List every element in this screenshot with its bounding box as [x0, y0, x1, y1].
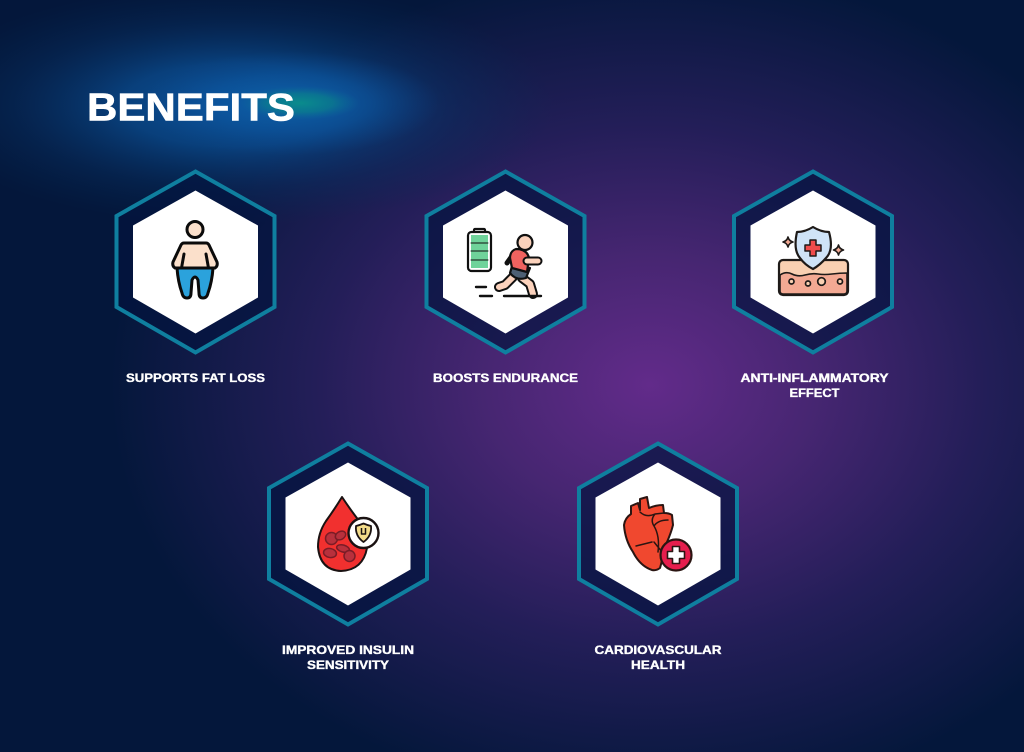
hexagon badge [734, 172, 892, 352]
label: IMPROVED INSULIN [282, 643, 414, 657]
hexagon badge [116, 172, 274, 352]
label: BOOSTS ENDURANCE [433, 371, 578, 385]
icon: shield over skin [779, 227, 848, 295]
icon: heart with cross [624, 497, 692, 570]
label: CARDIOVASCULAR [594, 643, 722, 657]
title: BENEFITS [87, 86, 295, 130]
icon: person with loose trousers [173, 222, 217, 298]
panel: improved insulin sensitivity: SENSITIVITY [307, 658, 389, 672]
panel: anti-inflammatory effect: EFFECT [790, 386, 840, 400]
panel: cardiovascular health: HEALTH [631, 658, 685, 672]
panel: cardiovascular health [579, 444, 737, 672]
title glow [0, 0, 600, 240]
panel: anti-inflammatory effect [734, 172, 892, 400]
icon: battery and runner [468, 229, 541, 296]
icon: blood drop with shield [318, 497, 378, 571]
label: SUPPORTS FAT LOSS [126, 371, 265, 385]
hexagon badge [269, 444, 427, 624]
label: ANTI-INFLAMMATORY [740, 371, 888, 385]
hexagon badge [426, 172, 584, 352]
hexagon badge [579, 444, 737, 624]
panel: boosts endurance [426, 172, 584, 385]
panel: improved insulin sensitivity [269, 444, 427, 672]
panel: supports fat loss [116, 172, 274, 385]
